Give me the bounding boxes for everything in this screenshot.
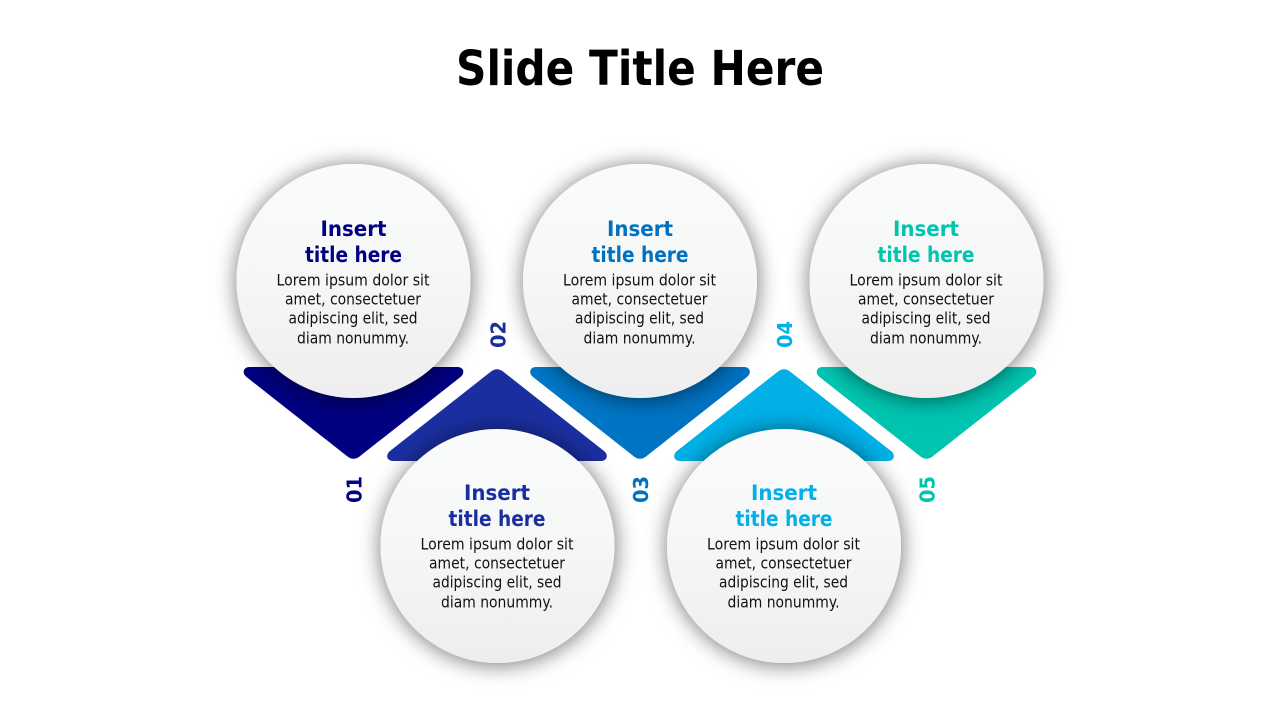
body text: adipiscing elit, sed <box>432 572 562 592</box>
panel: circle 03 <box>523 164 757 398</box>
heading: title here <box>448 507 546 532</box>
body text: Lorem ipsum dolor sit <box>276 270 430 290</box>
body text: adipiscing elit, sed <box>719 572 848 592</box>
body text: Lorem ipsum dolor sit <box>563 270 716 290</box>
arrow: triangle 04 <box>674 369 894 461</box>
heading: title here <box>878 243 974 268</box>
circle background <box>810 164 1044 398</box>
body text: diam nonummy. <box>728 592 840 612</box>
body text: Lorem ipsum dolor sit <box>850 270 1002 290</box>
heading: Insert <box>893 217 959 242</box>
arrow: triangle 05 <box>817 367 1036 459</box>
arrow: triangle 03 <box>530 367 750 459</box>
heading: Insert <box>320 217 386 242</box>
body text: Lorem ipsum dolor sit <box>420 534 574 554</box>
body text: amet, consectetuer <box>572 290 708 308</box>
body text: diam nonummy. <box>441 592 553 612</box>
number 05: 05 <box>916 476 940 503</box>
heading: Insert <box>607 217 673 242</box>
circle background <box>236 164 470 398</box>
body text: diam nonummy. <box>870 328 982 348</box>
heading: Insert <box>751 481 817 506</box>
body text: Lorem ipsum dolor sit <box>707 534 860 554</box>
body text: amet, consectetuer <box>285 290 421 308</box>
title: Slide Title Here <box>456 41 824 97</box>
number 03: 03 <box>629 476 653 503</box>
body text: adipiscing elit, sed <box>575 308 704 328</box>
arrow: triangle 01 <box>244 367 463 459</box>
body text: diam nonummy. <box>297 328 409 348</box>
body text: adipiscing elit, sed <box>288 308 418 328</box>
body text: adipiscing elit, sed <box>862 308 990 328</box>
arrow: triangle 02 <box>387 369 607 461</box>
panel: circle 05 <box>810 164 1044 398</box>
circle background <box>523 164 757 398</box>
panel: circle 01 <box>236 164 470 398</box>
heading: title here <box>305 243 402 268</box>
body text: amet, consectetuer <box>858 290 994 308</box>
number 01: 01 <box>342 476 366 503</box>
heading: title here <box>736 507 832 532</box>
heading: Insert <box>464 481 530 506</box>
number 04: 04 <box>773 321 797 348</box>
circle background <box>667 429 901 663</box>
heading: title here <box>592 243 688 268</box>
body text: diam nonummy. <box>584 328 696 348</box>
panel: circle 02 <box>380 429 614 663</box>
circle background <box>380 429 614 663</box>
number 02: 02 <box>486 321 510 348</box>
body text: amet, consectetuer <box>429 554 565 572</box>
body text: amet, consectetuer <box>716 554 852 572</box>
panel: circle 04 <box>667 429 901 663</box>
